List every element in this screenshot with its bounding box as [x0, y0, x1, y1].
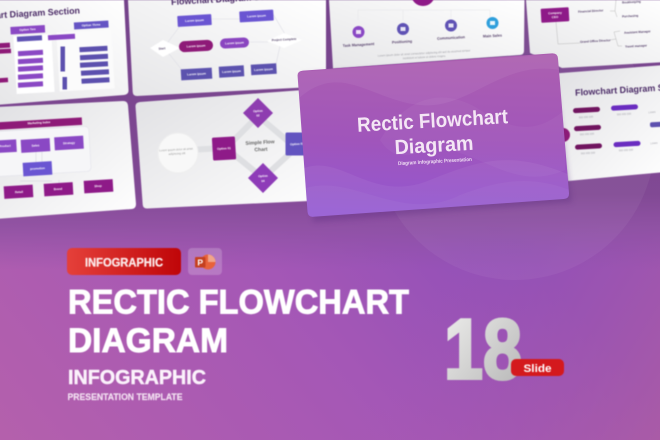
icon: communication	[445, 20, 457, 32]
rounded outline	[0, 126, 91, 177]
small data cells: Lorem	[650, 141, 658, 145]
list: option two items	[17, 34, 75, 88]
card title: Diagram	[394, 132, 474, 159]
track to circle	[195, 145, 217, 153]
box: sales: Sales	[31, 143, 40, 148]
panel: slide section top-left	[0, 0, 129, 105]
badge: infographic	[67, 248, 181, 275]
box: top right	[239, 10, 274, 22]
box: bottom row: Lorem ipsum	[187, 71, 206, 77]
panel: flowchart section right slide	[555, 65, 660, 181]
org labels: Purchasing	[622, 14, 639, 18]
box: brand	[44, 182, 73, 196]
box: bottom row: Lorem ipsum	[254, 67, 273, 72]
labels: Task Management	[343, 42, 375, 48]
connector lines	[358, 10, 490, 20]
pill: magenta	[179, 40, 213, 52]
labels: Communication	[437, 35, 466, 41]
small data cells: 000 000 000	[619, 148, 634, 152]
circle with description	[158, 133, 198, 173]
box: strategy: Strategy	[63, 141, 75, 145]
white list card right	[56, 29, 115, 92]
main title card	[297, 53, 572, 222]
description text	[378, 48, 471, 60]
labels	[343, 33, 502, 48]
box: retail	[4, 185, 33, 199]
faint large circle	[375, 0, 655, 280]
box: brand: Brand	[54, 187, 63, 191]
box: top left	[177, 14, 212, 27]
small data cells: 000 000 000	[617, 112, 632, 116]
pill: purple	[220, 37, 249, 49]
org labels: Travel manager	[625, 43, 648, 49]
box: product	[0, 139, 17, 153]
icon: task management	[352, 26, 364, 38]
box: shop: Shop	[94, 184, 102, 188]
box: option three	[74, 21, 109, 29]
small data cells: 000 000 000	[580, 132, 595, 136]
panel: slide marketing bottom-left	[0, 101, 136, 219]
icon: powerpoint: P	[197, 258, 203, 268]
pill labels	[573, 104, 660, 150]
small data cells: Lorem	[648, 110, 656, 114]
small data cells: 000 000 000	[581, 151, 596, 155]
labels: Main Sales	[483, 33, 502, 39]
connectors	[20, 152, 59, 184]
description text: incididunt ut labore et dolore magna	[403, 54, 446, 60]
option 03 square	[286, 132, 310, 156]
pill: purple: Lorem ipsum	[225, 40, 244, 46]
icon: powerpoint	[188, 248, 222, 275]
diamond track	[226, 116, 296, 178]
card title: Rectic Flowchart	[356, 105, 509, 137]
box: promotion	[23, 161, 52, 176]
option 01 square	[212, 136, 236, 161]
box: company ceo	[541, 7, 569, 23]
box: strategy	[54, 136, 84, 150]
description text: Lorem ipsum dolor sit amet consectetur adipiscing elit sed do eiusmod tempor	[378, 48, 471, 58]
bar: marketing index	[0, 117, 82, 130]
project complete node: Project Complete	[272, 37, 297, 42]
org labels	[578, 0, 652, 49]
option 04 diamond: 04	[261, 179, 265, 183]
icon: positioning	[397, 23, 409, 35]
option 04 diamond	[248, 163, 278, 193]
panel: slide flowchart top-middle	[128, 0, 326, 96]
box: company ceo: Company	[548, 11, 562, 15]
magenta stubs	[0, 43, 11, 83]
box: top left: Lorem ipsum	[185, 18, 204, 23]
number: 18: 18	[444, 302, 522, 398]
panel: simple flow chart slide	[135, 88, 330, 208]
start node: Start	[158, 46, 166, 51]
circle with description: adipiscing elit	[169, 151, 186, 156]
subtitle: infographic: INFOGRAPHIC	[68, 367, 206, 389]
option 01 square: Option 01	[217, 146, 231, 151]
list: option three items	[60, 46, 110, 90]
card subtitle: Diagram Infographic Presentation	[398, 157, 472, 167]
label: simple flow chart	[245, 139, 275, 153]
box: sales	[21, 138, 50, 153]
dark band behind slides	[0, 0, 660, 270]
option 04 diamond: Option	[258, 174, 268, 178]
option 02 diamond: 02	[256, 113, 260, 118]
bar: marketing index: Marketing Index	[27, 120, 51, 125]
box: bottom row	[181, 63, 277, 80]
badge: infographic: INFOGRAPHIC	[85, 256, 163, 270]
org labels: Assistant Manager	[624, 29, 652, 35]
option 02 diamond: Option	[253, 109, 263, 113]
magenta tab	[556, 128, 570, 142]
white list card	[13, 34, 55, 94]
circle with description: Lorem ipsum dolor sit amet	[159, 147, 193, 152]
connector lines	[165, 14, 285, 70]
box: shop	[84, 179, 113, 193]
org connector lines	[556, 0, 622, 46]
box: option three: Option Three	[82, 22, 101, 28]
org labels: Grand Office Director	[580, 38, 611, 44]
option 02 diamond	[243, 98, 273, 128]
box: promotion: promotion	[30, 166, 45, 171]
small data cells: 000 000 000	[579, 115, 594, 119]
org labels: Financial Director	[578, 8, 604, 14]
badge: slide	[511, 359, 564, 376]
icon: main sales	[486, 17, 498, 29]
subtitle: presentation template: PRESENTATION TEMPLATE	[68, 392, 182, 403]
labels: Positioning	[392, 39, 412, 45]
panel: org chart slide	[526, 0, 660, 68]
start node	[150, 40, 180, 57]
pill: magenta: Lorem ipsum	[186, 43, 206, 49]
box: top right: Lorem ipsum	[247, 13, 266, 19]
card title	[356, 105, 509, 159]
badge: slide: Slide	[524, 363, 552, 375]
main title: DIAGRAM	[68, 322, 228, 360]
box: option two	[10, 25, 45, 34]
box: company ceo: CEO	[552, 15, 559, 19]
project complete node	[267, 33, 302, 48]
box: retail: Retail	[15, 190, 23, 194]
main title: RECTIC FLOWCHART	[68, 284, 409, 322]
main title	[68, 284, 409, 360]
option 03 square: Option 03	[290, 142, 304, 146]
panel: task icons slide	[329, 0, 524, 68]
box: option two: Option Two	[19, 27, 36, 32]
wave pattern	[297, 54, 570, 218]
small data cells	[579, 110, 658, 155]
top circle	[411, 0, 435, 6]
box: bottom row: Lorem ipsum	[222, 69, 241, 74]
label: simple flow chart: Simple Flow	[245, 139, 275, 147]
label: simple flow chart: Chart	[254, 147, 268, 153]
